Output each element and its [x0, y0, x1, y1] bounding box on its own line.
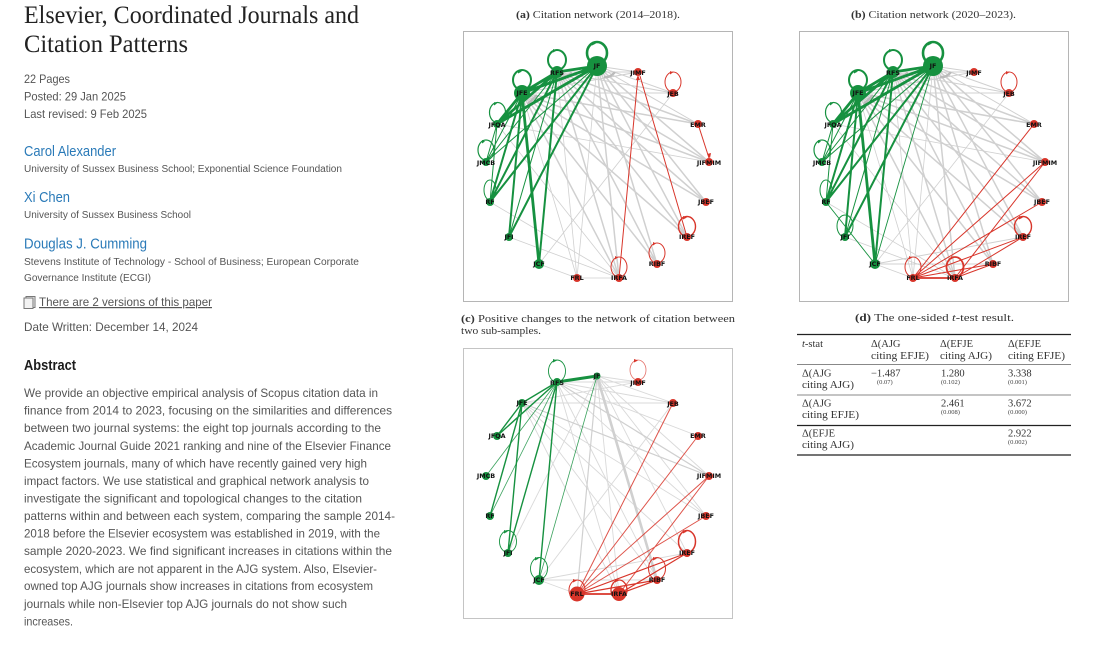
table row 1: Δ(AJG: [802, 368, 832, 380]
panel: citation network c: JIMF: [629, 379, 646, 387]
table: t-test result: [797, 334, 1071, 455]
authors: Douglas J. Cumming: [24, 236, 147, 252]
authors: Carol Alexander: [24, 144, 116, 160]
authors: University of Sussex Business School: [24, 210, 191, 221]
panel: citation network c: RFS: [550, 379, 564, 387]
table header: [802, 339, 1066, 362]
table row 2: Δ(AJG: [802, 398, 832, 410]
panel: citation network c: [464, 348, 732, 618]
title: [24, 2, 359, 58]
panel: citation network c: JCF: [532, 576, 545, 584]
table header: Δ(EFJE: [1008, 339, 1041, 350]
table row 2: (0.000): [1008, 409, 1027, 416]
abstract text: journals while non-Elsevier top AJG journals do not show such: [23, 597, 347, 611]
authors: [24, 144, 359, 284]
caption a: (a) Citation network (2014–2018).: [516, 10, 680, 21]
table header: t-stat: [802, 339, 823, 350]
table row 3: [802, 428, 1032, 451]
panel: citation network c: JEB: [666, 400, 679, 408]
table row 3: (0.002): [1008, 439, 1027, 446]
panel: citation network c: JFQA: [487, 432, 506, 440]
icon: document copies: [24, 296, 35, 308]
abstract text: finance from 2014 to 2023, focusing on the similarities and differences: [24, 404, 392, 418]
table header: citing EFJE): [1008, 351, 1066, 362]
authors: Xi Chen: [24, 190, 70, 206]
caption c: [461, 314, 736, 337]
caption b: (b) Citation network (2020–2023).: [851, 10, 1016, 21]
abstract text: 2018 before the Elsevier ecosystem was established in 2019, with the: [24, 526, 380, 540]
table row 2: 3.672: [1008, 398, 1032, 410]
panel: citation network c: FRL: [570, 590, 584, 598]
abstract text: between two journal systems: the eight top journals according to the: [24, 421, 381, 435]
authors: University of Sussex Business School; Exponential Science Foundation: [24, 164, 342, 175]
caption d: (d) The one-sided t-test result.: [855, 313, 1014, 324]
table row 3: Δ(EFJE: [802, 428, 835, 440]
title: Citation Patterns: [24, 31, 188, 58]
table row 1: 1.280: [941, 368, 965, 380]
table row 1: (0.07): [877, 379, 893, 386]
abstract text: patterns within and between each system, comparing the sample 2014-: [24, 509, 395, 523]
panel: citation network c: RIBF: [649, 576, 665, 584]
table row 1: −1.487: [871, 368, 901, 380]
abstract text: ecosystem, which are not apparent in the AJG system. Also, Elsevier-: [24, 562, 377, 576]
abstract text: investigate the significant and topological changes to the citation: [24, 492, 362, 506]
panel: citation network c: JF: [593, 372, 600, 380]
table row 1: citing AJG): [802, 380, 855, 391]
panel: citation network c: EMR: [690, 432, 706, 440]
date written: Date Written: December 14, 2024: [24, 320, 198, 334]
table header: citing AJG): [940, 351, 993, 362]
paper metadata: Last revised: 9 Feb 2025: [24, 107, 147, 121]
abstract text: impact factors. We use statistical and graphical network analysis to: [24, 474, 369, 488]
table row 1: (0.001): [1008, 379, 1027, 386]
table row 2: citing EFJE): [802, 410, 860, 421]
paper metadata: [24, 72, 147, 121]
abstract text: Ecosystem journals, many of which have recently gained very high: [24, 456, 367, 470]
table header: citing EFJE): [871, 351, 930, 362]
caption c: two sub-samples.: [461, 326, 541, 337]
caption c: (c) Positive changes to the network of citation between: [461, 314, 736, 325]
abstract text: Academic Journal Guide 2021 ranking and nine of the Elsevier Finance: [24, 439, 391, 453]
abstract text: owned top AJG journals show increases in citations from ecosystem: [24, 579, 373, 593]
panel: citation network c: JBEF: [697, 512, 714, 520]
abstract text: [23, 386, 395, 628]
panel: citation network c: IRFA: [611, 590, 627, 598]
table row 3: citing AJG): [802, 440, 855, 451]
table header: Δ(AJG: [871, 339, 901, 350]
authors: Governance Institute (ECGI): [24, 273, 151, 284]
table header: Δ(EFJE: [940, 339, 973, 350]
panel: citation network c: JFE: [515, 399, 528, 407]
abstract heading: Abstract: [24, 357, 76, 374]
paper metadata: Posted: 29 Jan 2025: [24, 90, 126, 104]
table row 2: [802, 398, 1032, 421]
table row 2: 2.461: [941, 398, 965, 410]
panel: citation network c: JMCB: [476, 472, 495, 480]
abstract text: sample 2020-2023. We find significant increases in citations within the: [24, 544, 392, 558]
table row 1: [802, 368, 1032, 391]
panel: citation network b: [800, 32, 1068, 302]
title: Elsevier, Coordinated Journals and: [24, 2, 359, 29]
panel: citation network c: IREF: [679, 549, 695, 557]
paper metadata: 22 Pages: [24, 72, 70, 86]
panel: citation network c: JIFMIM: [696, 472, 721, 480]
table row 3: 2.922: [1008, 428, 1032, 440]
panel: citation network a: [464, 32, 732, 302]
panel: citation network c: RF: [485, 512, 495, 520]
panel: citation network c: JFI: [502, 549, 513, 557]
table row 1: 3.338: [1008, 368, 1032, 380]
authors: Stevens Institute of Technology - School of Business; European Corporate: [24, 257, 359, 268]
versions link: There are 2 versions of this paper: [39, 295, 212, 309]
table row 1: (0.102): [941, 379, 960, 386]
table row 2: (0.008): [941, 409, 960, 416]
abstract text: increases.: [24, 614, 73, 628]
abstract text: We provide an objective empirical analysis of Scopus citation data in: [24, 386, 378, 400]
